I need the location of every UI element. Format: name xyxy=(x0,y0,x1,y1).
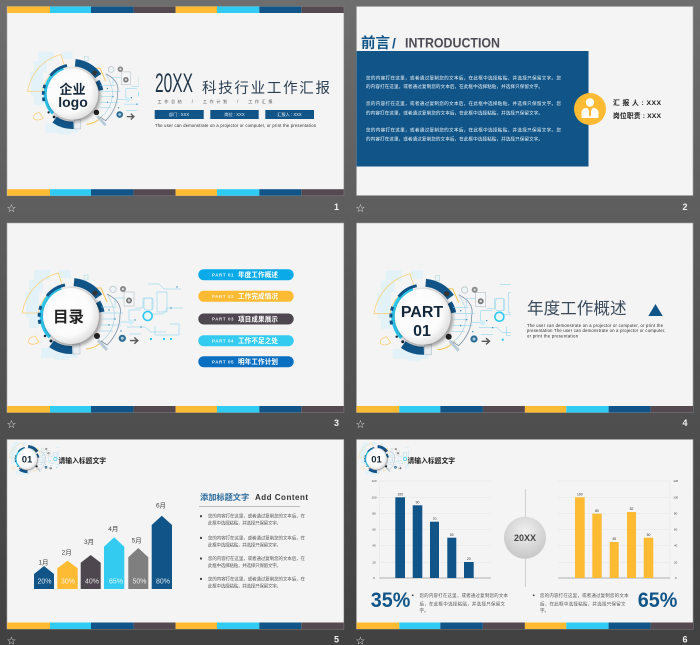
heading: / xyxy=(392,35,396,51)
cover subtitle: 工作总结 / 工作计划 / 工作汇报 xyxy=(158,98,273,105)
arrow bar chart: 3月 xyxy=(84,538,94,546)
arrow bar chart: 65% xyxy=(109,578,123,586)
bullet list: 此框中选择粘贴，并选择只保留文字。 xyxy=(208,562,281,569)
blue text panel: 的内容打在这里，或者通过复制您的文本后，在此框中选择粘贴，并选择只保留文字。 xyxy=(366,83,543,90)
part label: PART xyxy=(401,304,443,321)
slide title: 请输入标题文字 xyxy=(408,456,455,465)
menu pills: PART 02 xyxy=(212,294,234,299)
right bar chart: 0 xyxy=(675,576,677,580)
left bar chart xyxy=(371,479,491,580)
right bar chart: 100 xyxy=(673,495,679,499)
menu pills: PART 05 xyxy=(212,359,234,364)
left note: 字。 xyxy=(420,607,428,613)
content heading: 添加标题文字 xyxy=(200,492,249,502)
right bar chart: 40 xyxy=(674,544,678,548)
logo graphic xyxy=(27,52,139,134)
slide title: 请输入标题文字 xyxy=(58,456,106,465)
slide marker: ☆ xyxy=(356,418,366,431)
triangle xyxy=(648,304,663,316)
bullet list xyxy=(200,513,306,589)
badge xyxy=(358,442,409,476)
heading xyxy=(361,34,500,52)
right note xyxy=(533,592,629,613)
left bar chart: 70 xyxy=(433,517,436,521)
left note xyxy=(412,592,508,613)
slide marker xyxy=(6,634,339,645)
info tags xyxy=(155,110,314,119)
arrow bar chart xyxy=(34,502,172,589)
blue text panel: 的内容打在这里，或者通过复制您的文本后，在此框中选择粘贴，并选择只保留文字。 xyxy=(366,135,543,142)
blue text panel xyxy=(356,51,588,166)
cover english line: The user can demonstrate on a projector or computer, or print the presentation xyxy=(155,123,317,128)
arrow bar chart: 40% xyxy=(85,578,99,586)
slide marker: 4 xyxy=(682,418,688,428)
left bar chart: 60 xyxy=(372,527,376,531)
left bar chart: 50 xyxy=(450,533,454,537)
arrow bar chart: 30% xyxy=(61,578,75,586)
right bar chart: 60 xyxy=(674,527,678,531)
menu pills: PART 01 xyxy=(212,272,234,277)
heading: 前言 xyxy=(361,34,390,52)
slide marker: ☆ xyxy=(356,202,366,215)
icon: reporter xyxy=(574,93,606,125)
right bar chart: 82 xyxy=(630,507,633,511)
bullet list: 此框中选择粘贴，并选择只保留文字。 xyxy=(208,541,281,548)
left note: 后，在此框中选择粘贴，并选择只保留文 xyxy=(420,600,506,607)
arrow bar chart: 50% xyxy=(132,578,147,586)
menu pills: 明年工作计划 xyxy=(238,357,278,366)
cover title: 科技行业工作汇报 xyxy=(202,80,330,97)
part label: 01 xyxy=(413,323,431,340)
logo text xyxy=(58,82,88,110)
badge: 01 xyxy=(371,454,382,466)
right bar chart xyxy=(558,479,679,580)
badge xyxy=(8,442,60,476)
info tags: 岗位 : XXX xyxy=(224,111,245,117)
right bar chart: 20 xyxy=(674,560,678,564)
bullet list: 您的内容打在这里，或者通过复制您的文本后，在 xyxy=(208,534,306,541)
arrow bar chart: 4月 xyxy=(108,525,118,533)
left bar chart: 100 xyxy=(397,492,403,496)
bullet list: 此框中选择粘贴，并选择只保留文字。 xyxy=(208,520,281,527)
right bar chart: 80 xyxy=(595,509,599,513)
logo text: 企业 xyxy=(59,82,86,97)
right bar chart: 100 xyxy=(577,492,583,496)
slide 1: cover xyxy=(6,6,344,215)
circuit graphic xyxy=(374,270,511,360)
bullet list: 您的内容打在这里，或者通过复制您的文本后，在 xyxy=(208,513,306,520)
logo text: logo xyxy=(58,94,88,110)
arrow bar chart: 5月 xyxy=(132,536,142,544)
slide 2: introduction xyxy=(356,6,693,215)
slide marker: 1 xyxy=(334,202,339,212)
section description: The user can demonstrate on a projector or computer, or print the xyxy=(527,323,664,328)
left bar chart: 80 xyxy=(372,511,376,515)
slide marker xyxy=(6,202,339,215)
left bar chart: 0 xyxy=(373,576,375,580)
menu pills: 年度工作概述 xyxy=(238,270,278,279)
heading: INTRODUCTION xyxy=(405,34,500,50)
slide 3: contents xyxy=(6,223,344,431)
section description: or print the presentation xyxy=(527,334,579,338)
center year badge xyxy=(504,489,546,587)
reporter info: 汇 报 人 : XXX xyxy=(613,98,661,107)
section description xyxy=(527,323,666,338)
blue text panel: 您的内容打在这里，或者通过复制您的文本后，在此框中选择粘贴，并选择只保留文字。您 xyxy=(366,74,561,81)
part label xyxy=(401,304,443,340)
info tags: 汇报人 : XXX xyxy=(277,111,302,118)
menu pills: 工作完成情况 xyxy=(238,292,278,301)
slide 4: part 01 xyxy=(356,223,693,431)
left bar chart: 90 xyxy=(416,500,419,504)
center year badge: 20XX xyxy=(514,533,536,543)
slide marker xyxy=(356,418,688,431)
left bar chart: 20 xyxy=(372,560,376,564)
right percentage: 65% xyxy=(638,588,677,612)
right note: 您的内容打在这里，或者通过复制您的文本 xyxy=(540,592,629,599)
contents title: 目录 xyxy=(53,308,84,326)
menu pills xyxy=(198,269,294,367)
slide marker: 6 xyxy=(682,634,688,644)
reporter info xyxy=(613,98,661,120)
right note: 字。 xyxy=(540,607,549,613)
menu pills: PART 03 xyxy=(212,317,234,322)
content heading: Add Content xyxy=(255,493,308,502)
slide marker xyxy=(356,202,688,215)
slide marker: 3 xyxy=(334,418,339,428)
arrow bar chart: 1月 xyxy=(38,558,49,566)
menu pills: 工作不足之处 xyxy=(238,336,278,345)
right bar chart: 120 xyxy=(673,479,679,483)
slide 5: arrow bars xyxy=(6,440,344,645)
section description: presentation The user can demonstrate on a projector or computer, xyxy=(527,328,666,333)
bullet list: 此框中选择粘贴，并选择只保留文字。 xyxy=(208,582,281,589)
left bar chart: 120 xyxy=(371,479,377,483)
slide marker: 5 xyxy=(334,634,339,644)
slide marker: ☆ xyxy=(6,418,16,431)
left percentage: 35% xyxy=(371,588,410,612)
left bar chart: 20 xyxy=(467,557,471,561)
arrow bar chart: 6月 xyxy=(156,502,166,510)
badge: 01 xyxy=(22,454,33,466)
right bar chart: 45 xyxy=(612,537,616,541)
blue text panel: 您的内容打在这里，或者通过复制您的文本后，在此框中选择粘贴，并选择只保留文字。您 xyxy=(366,126,561,133)
slide marker: 2 xyxy=(682,202,688,212)
reporter info: 岗位职责 : XXX xyxy=(613,111,661,120)
blue text panel: 您的内容打在这里，或者通过复制您的文本后，在此框中选择粘贴，并选择只保留文字。您 xyxy=(366,100,561,107)
section title: 年度工作概述 xyxy=(527,299,627,318)
left note: 您的内容打在这里，或者通过复制您的文本 xyxy=(420,592,508,599)
right bar chart: 80 xyxy=(674,511,678,515)
content heading xyxy=(199,492,308,506)
slide 6: comparison charts xyxy=(356,440,693,645)
arrow bar chart: 2月 xyxy=(62,548,72,556)
menu pills: PART 04 xyxy=(212,338,234,343)
right note: 后，在此框中选择粘贴，并选择只保留文 xyxy=(540,600,626,607)
menu pills: 项目成果展示 xyxy=(238,314,278,323)
left bar chart: 100 xyxy=(371,495,377,499)
slide marker xyxy=(6,418,339,431)
circuit graphic xyxy=(22,270,183,360)
bullet list: 您的内容打在这里，或者通过复制您的文本后，在 xyxy=(208,575,306,582)
arrow bar chart: 80% xyxy=(156,578,170,586)
left bar chart: 40 xyxy=(372,544,376,548)
info tags: 部门 : XXX xyxy=(169,111,189,118)
slide marker: ☆ xyxy=(6,202,16,215)
right bar chart: 50 xyxy=(647,533,650,537)
cover title number: 20XX xyxy=(155,68,193,98)
blue text panel: 的内容打在这里，或者通过复制您的文本后，在此框中选择粘贴，并选择只保留文字。 xyxy=(366,109,543,116)
arrow bar chart: 20% xyxy=(37,578,52,586)
slide marker xyxy=(356,634,688,645)
bullet list: 您的内容打在这里，或者通过复制您的文本后，在 xyxy=(208,555,306,562)
